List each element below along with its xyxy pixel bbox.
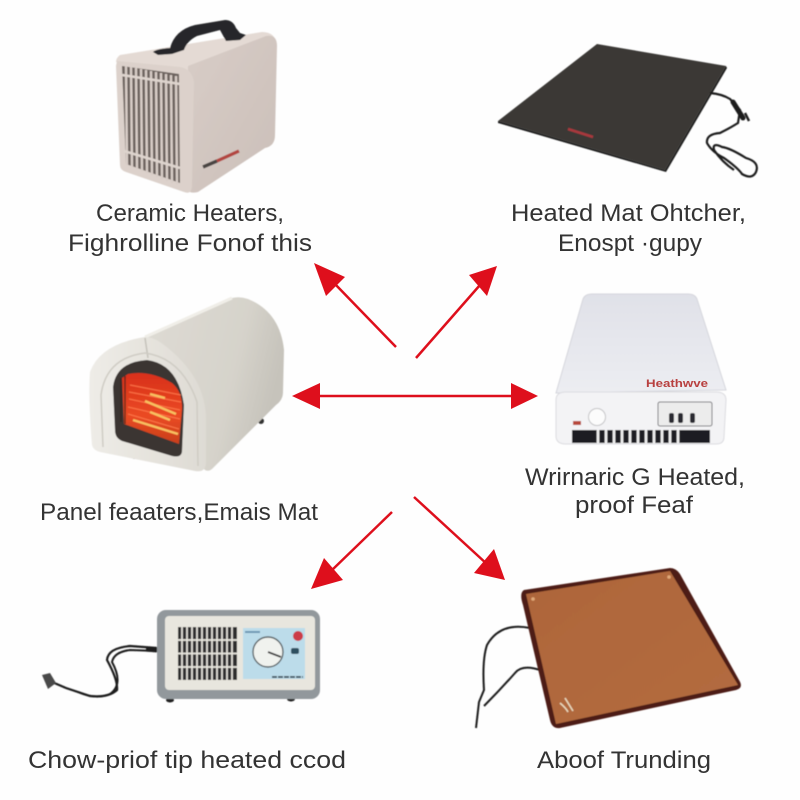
- icon: control box with cord: [42, 610, 320, 702]
- label: aboof trunding: Aboof Trunding: [537, 747, 711, 774]
- arrow: horizontal double: [292, 383, 538, 409]
- panel: panel heater: [40, 297, 318, 526]
- brand label: Heathwve: [646, 378, 708, 390]
- panel: brown heated pad: [476, 568, 741, 774]
- icon: ceramic heater device: [116, 20, 277, 193]
- icon: arched infrared heater: [89, 297, 284, 471]
- icon: black heated mat with cord: [498, 44, 757, 177]
- panel: white heater unit: [525, 294, 752, 519]
- label: panel heaters: Panel feaaters,Emais Mat: [40, 499, 318, 526]
- arrow: down-right: [414, 497, 505, 580]
- icon: white heater box: [556, 294, 726, 444]
- label: ceramic heaters: Ceramic Heaters,: [96, 200, 284, 227]
- arrow: down-left: [311, 512, 392, 589]
- label: heated mat: Enospt ·gupy: [558, 230, 702, 257]
- label: wrirnaric heated: proof Feaf: [575, 492, 693, 519]
- label: chow-priof tip heated ccod: Chow-priof tip heated ccod: [28, 747, 346, 774]
- panel: heated mat: [498, 44, 757, 257]
- label: ceramic heaters: Fighrolline Fonof this: [68, 230, 312, 257]
- arrow: up-right: [416, 266, 497, 358]
- panel: ceramic heater: [68, 20, 312, 257]
- label: wrirnaric heated: Wrirnaric G Heated,: [525, 464, 745, 491]
- label: heated mat: Heated Mat Ohtcher,: [511, 200, 746, 227]
- arrow: up-left: [314, 263, 396, 347]
- icon: brown heated pad with cord: [476, 568, 741, 728]
- panel: control box heater: [28, 610, 346, 774]
